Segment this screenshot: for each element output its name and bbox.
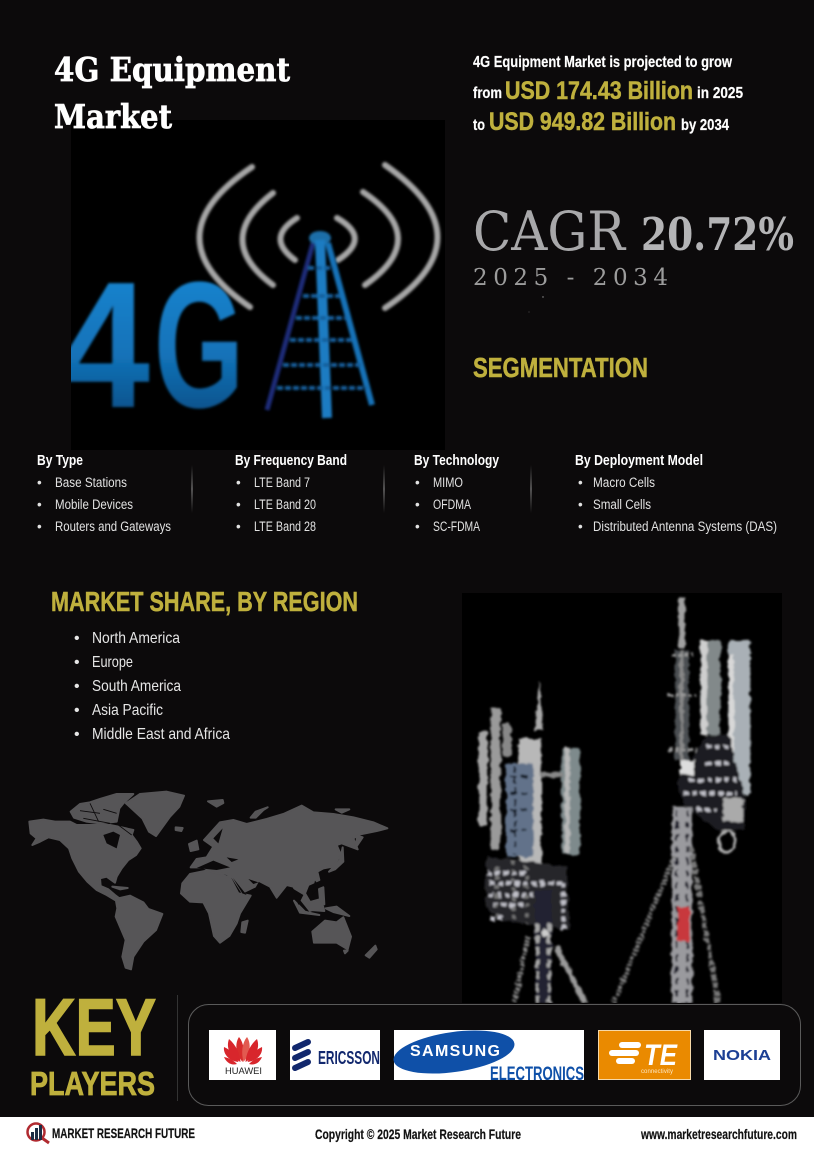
footer [0,1117,814,1150]
region list: Middle East and Africa [92,726,230,743]
CAGR block: CAGR [473,200,626,263]
segmentation: by type: Routers and Gateways [55,519,171,534]
segmentation: by frequency band: • [236,475,241,490]
world map [29,792,387,969]
heading: market share by region: MARKET SHARE, BY REGION [51,586,358,617]
segmentation: by frequency band: • [236,497,241,512]
market size projection text [473,54,743,136]
segmentation: by technology: MIMO [433,475,463,490]
region list: Asia Pacific [92,702,163,719]
segmentation: by deployment model: Small Cells [593,497,651,512]
segmentation: by frequency band: • [236,519,241,534]
heading: segmentation: SEGMENTATION [473,352,648,383]
market size projection text: USD 949.82 Billion [489,108,676,136]
footer logo icon [28,1124,49,1143]
key players heading: PLAYERS [30,1065,155,1102]
segmentation: by deployment model [575,452,777,534]
left tower antennas [478,682,585,1003]
region list: • [74,726,80,743]
market size projection text: USD 174.43 Billion [505,77,693,105]
key players panel [188,1004,800,1106]
title: Market [54,97,173,136]
segmentation: by deployment model: Macro Cells [593,475,655,490]
key players heading [30,983,156,1102]
logo: TE Connectivity [598,1030,690,1080]
segmentation: by technology: OFDMA [433,497,471,512]
logo: Nokia: NOKIA [713,1047,771,1064]
logo: Ericsson [290,1030,380,1080]
segmentation: by technology [414,452,500,534]
segmentation: by frequency band: By Frequency Band [235,452,347,469]
map water cut-outs [80,803,320,905]
region list: Europe [92,654,133,671]
signal arcs [199,165,438,308]
footer: MARKET RESEARCH FUTURE [52,1125,195,1141]
image: cell towers photo [462,593,782,1003]
footer: Copyright © 2025 Market Research Future [315,1126,521,1142]
segmentation: by frequency band: LTE Band 20 [254,497,316,512]
right tower antennas [614,598,750,1003]
segmentation: by deployment model: Distributed Antenna Systems (DAS) [593,519,777,534]
segmentation: by frequency band [235,452,347,534]
segmentation: by type: • [37,519,42,534]
logo: Samsung Electronics [391,1024,584,1085]
region list [74,630,230,743]
market size projection text: to [473,117,485,134]
segmentation: by deployment model: • [578,497,583,512]
key players heading: KEY [32,983,156,1073]
segmentation: by frequency band: LTE Band 28 [254,519,316,534]
logo: Samsung Electronics: ELECTRONICS [490,1064,584,1085]
region list: • [74,654,80,671]
segmentation: by frequency band: LTE Band 7 [254,475,310,490]
segmentation: by deployment model: By Deployment Model [575,452,703,469]
title [54,50,291,136]
CAGR block [473,200,794,291]
segmentation: by deployment model: • [578,475,583,490]
market size projection text: from [473,85,502,102]
segmentation: by deployment model: • [578,519,583,534]
segmentation: by type [37,452,171,534]
region list: • [74,678,80,695]
region list: North America [92,630,180,647]
segmentation: by technology: SC-FDMA [433,519,480,534]
market size projection text: 4G Equipment Market is projected to grow [473,54,733,71]
market size projection text: by 2034 [681,117,729,134]
image: 4G tower [58,120,445,450]
segmentation: by type: By Type [37,452,83,469]
segmentation: by type: • [37,497,42,512]
region list: • [74,630,80,647]
title: 4G Equipment [54,50,291,89]
segmentation: by type: Base Stations [55,475,127,490]
4G blue lettering: 4 [58,245,150,446]
logo: TE Connectivity: connectivity [641,1069,673,1075]
CAGR block: 2025 - 2034 [473,265,668,291]
segmentation: by technology: • [415,519,420,534]
logo: Samsung Electronics: SAMSUNG [410,1043,500,1060]
logo: Ericsson: ERICSSON [318,1048,380,1068]
logo: Huawei: HUAWEI [225,1066,262,1076]
market size projection text: in 2025 [697,85,743,102]
region list: • [74,702,80,719]
segmentation: by technology: • [415,475,420,490]
4G blue lettering: G [154,245,244,446]
region list: South America [92,678,181,695]
logo: TE Connectivity: TE [644,1039,678,1072]
logo: Nokia [704,1030,780,1080]
segmentation: by type: • [37,475,42,490]
segmentation: by technology: By Technology [414,452,500,469]
logo: Huawei [209,1030,276,1080]
blue lattice tower [267,231,372,418]
4G blue lettering [71,280,239,410]
segmentation: by technology: • [415,497,420,512]
segmentation: by type: Mobile Devices [55,497,133,512]
